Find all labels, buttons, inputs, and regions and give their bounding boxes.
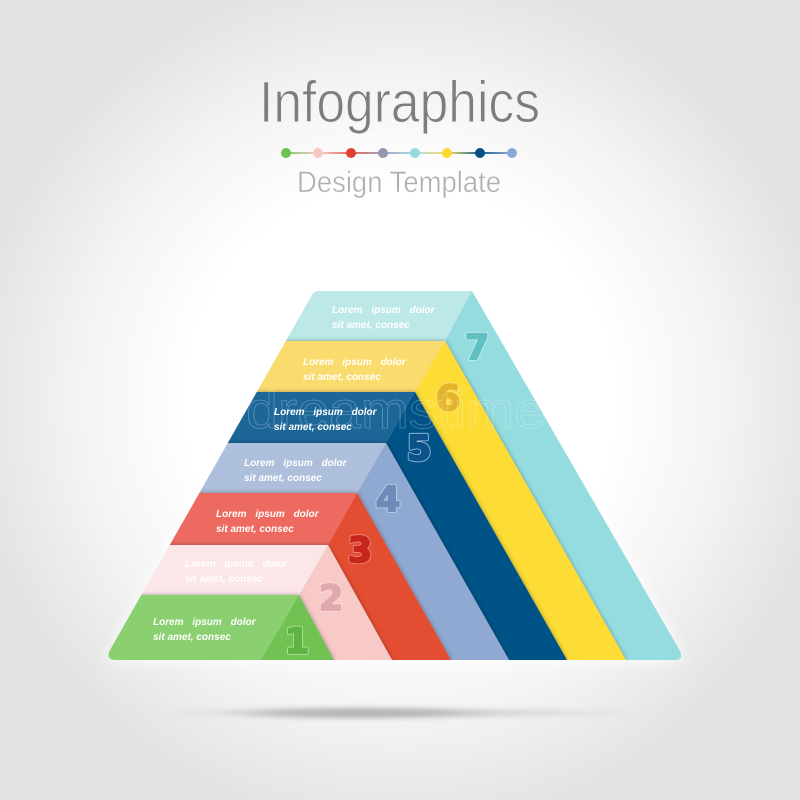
layer 6: Lorem ipsum dolor [303, 357, 407, 368]
layer 4 [180, 443, 509, 660]
layer 1 [90, 595, 334, 662]
layer 2 [120, 545, 392, 660]
layer 4: sit amet, consec [244, 473, 322, 484]
layer 7 [280, 291, 690, 660]
layer 7: Lorem ipsum dolor [332, 305, 436, 316]
layer 1: sit amet, consec [153, 632, 231, 643]
layer 1: Lorem ipsum dolor [153, 617, 257, 628]
layer 4: 4 [376, 480, 400, 520]
ground shadow [133, 706, 663, 720]
pyramid [90, 291, 690, 662]
layer 5: Lorem ipsum dolor [274, 407, 378, 418]
layer 3: 3 [348, 531, 372, 571]
layer 1: 1 [285, 622, 309, 662]
layer 7: 7 [465, 328, 489, 368]
watermark: dreamstime [246, 382, 546, 440]
layer 1: 1 [285, 622, 309, 662]
white glow behind pyramid [108, 291, 682, 660]
subtitle: Design Template [297, 166, 501, 199]
layer 5: sit amet, consec [274, 422, 352, 433]
layer 3: Lorem ipsum dolor [216, 509, 320, 520]
layer 2: Lorem ipsum dolor [185, 559, 289, 570]
layer 2: sit amet, consec [185, 574, 263, 585]
timeline of coloured dots [281, 148, 517, 158]
layer 2: 2 [319, 579, 343, 619]
layer 7: 7 [465, 328, 489, 368]
layer 6: 6 [436, 379, 460, 419]
layer 4: 4 [376, 480, 400, 520]
layer 5: 5 [407, 429, 431, 469]
layer 7: sit amet, consec [332, 320, 410, 331]
layer 6: 6 [436, 379, 460, 419]
layer 3: sit amet, consec [216, 524, 294, 535]
layer 6 [240, 341, 626, 660]
layer 5 [210, 392, 567, 660]
layer 5: 5 [407, 429, 431, 469]
layer 6: sit amet, consec [303, 372, 381, 383]
layer 2: 2 [319, 579, 343, 619]
layer 4: Lorem ipsum dolor [244, 458, 348, 469]
layer 3: 3 [348, 531, 372, 571]
title: Infographics [259, 70, 540, 135]
layer 3 [150, 493, 451, 660]
